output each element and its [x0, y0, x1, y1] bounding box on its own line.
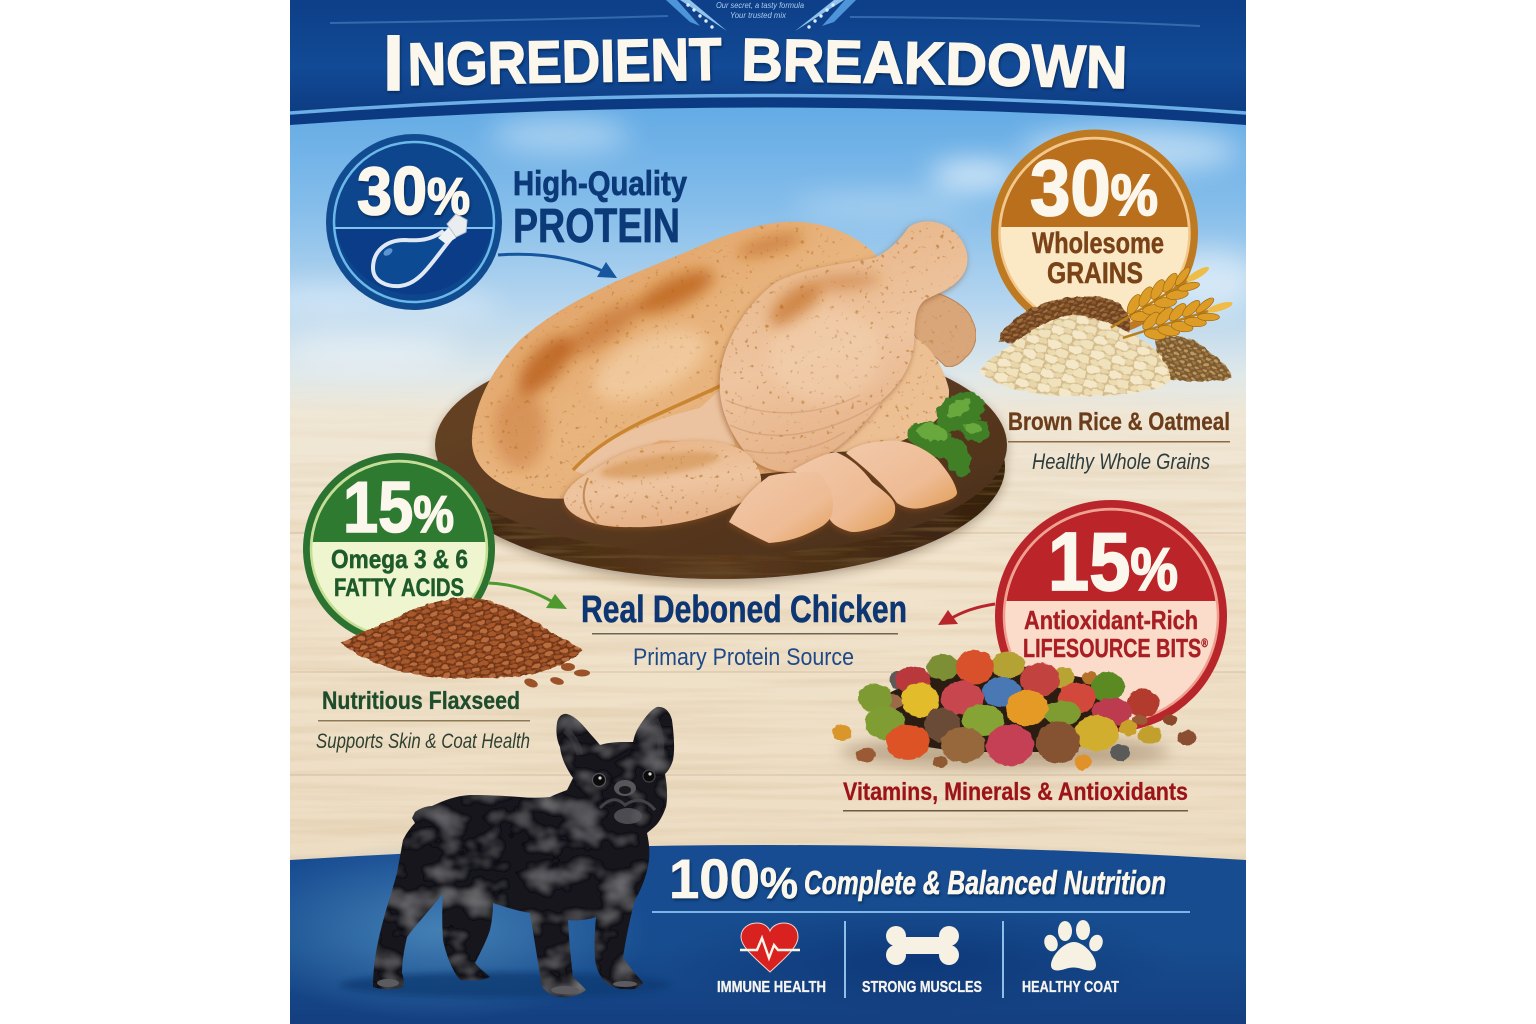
callout: lifesource bits [832, 500, 1227, 812]
badge label: FATTY ACIDS [334, 574, 464, 602]
percent value: 30% [357, 153, 470, 229]
heading: high-quality protein: PROTEIN [513, 200, 680, 253]
wooden plate [435, 335, 1007, 579]
chicken slices [729, 440, 957, 543]
title: I [383, 18, 404, 107]
percent value: 30% [1030, 143, 1158, 232]
badge label: Antioxidant-Rich [1024, 605, 1198, 635]
benefit: healthy coat [1022, 920, 1119, 996]
title: NGREDIENT [407, 26, 722, 98]
badge label: Omega 3 & 6 [331, 544, 468, 574]
caption: vitamins minerals antioxidants: Vitamins, Minerals & Antioxidants [843, 778, 1188, 806]
callout: omega fatty acids [303, 453, 590, 753]
badge: 15% antioxidant [995, 500, 1227, 732]
grain piles with wheat [980, 267, 1232, 397]
kibble pile [832, 650, 1197, 770]
pale underside [573, 388, 735, 477]
heading: complete and balanced nutrition: 100% [669, 847, 798, 910]
top emblem fragment [666, 0, 856, 31]
title [387, 35, 1127, 94]
rear thigh [830, 336, 949, 452]
chicken on wooden plate [435, 221, 1007, 579]
icon: drumstick [373, 214, 467, 286]
arrow: omega to chicken [488, 583, 567, 609]
flaxseed pile [340, 597, 590, 689]
top emblem fragment: Your trusted mix [730, 11, 787, 20]
badge label: GRAINS [1047, 257, 1143, 290]
benefit: strong muscles: STRONG MUSCLES [862, 979, 982, 996]
parsley garnish [908, 391, 990, 478]
footer banner [230, 840, 1246, 1024]
top emblem fragment: Our secret, a tasty formula [716, 1, 805, 10]
caption: brown rice and oatmeal: Healthy Whole Grains [1032, 449, 1210, 474]
callout: protein [326, 134, 687, 310]
chicken leg [720, 221, 967, 472]
whole chicken breast [472, 222, 900, 499]
caption: real deboned chicken: Primary Protein Source [633, 644, 854, 671]
benefit: strong muscles [862, 926, 982, 996]
caption: brown rice and oatmeal [1008, 408, 1230, 474]
badge: 30% protein [326, 134, 502, 310]
heading: high-quality protein: High-Quality [513, 165, 687, 203]
french bulldog [340, 707, 674, 998]
header banner [290, 0, 1246, 125]
caption: real deboned chicken: Real Deboned Chicken [581, 589, 907, 631]
title: BREAKDOWN [741, 26, 1128, 101]
caption: real deboned chicken [581, 589, 907, 671]
percent value: 15% [1048, 515, 1178, 608]
icon: heart with pulse [740, 923, 800, 972]
dog face [592, 770, 655, 824]
icon: bone [886, 926, 959, 965]
benefit: immune health: IMMUNE HEALTH [717, 979, 826, 996]
badge label [1032, 231, 1164, 284]
badge label [332, 550, 468, 596]
caption: nutritious flaxseed: Supports Skin & Coat Health [316, 730, 530, 753]
heading: complete and balanced nutrition [669, 847, 1166, 910]
infographic canvas [290, 0, 1246, 1024]
front drumstick piece [564, 440, 761, 527]
benefit: immune health [717, 923, 826, 996]
badge: 30% grains [991, 130, 1198, 336]
badge label: LIFESOURCE BITS [1023, 633, 1257, 663]
heading: complete and balanced nutrition: Complete & Balanced Nutrition [804, 864, 1166, 901]
callout: grains [980, 130, 1237, 474]
percent value: 15% [343, 468, 454, 548]
illustrated poster panel [230, 0, 1260, 1024]
benefit: healthy coat: HEALTHY COAT [1022, 979, 1119, 996]
badge label [1024, 610, 1208, 658]
caption: brown rice and oatmeal: Brown Rice & Oatmeal [1008, 408, 1230, 436]
badge label: ® [1201, 636, 1208, 650]
arrow: protein to chicken [498, 254, 617, 278]
badge label: Wholesome [1032, 227, 1164, 260]
caption: nutritious flaxseed [316, 687, 530, 753]
background: sky fading to wood [260, 90, 1260, 880]
icon: paw print [1042, 920, 1105, 970]
rear knob [910, 294, 976, 367]
badge: 15% omega [303, 453, 495, 645]
arrow: bits to chicken [938, 604, 995, 625]
caption: nutritious flaxseed: Nutritious Flaxseed [322, 687, 520, 715]
heading: high-quality protein [514, 170, 688, 243]
dog silhouette [373, 707, 674, 997]
